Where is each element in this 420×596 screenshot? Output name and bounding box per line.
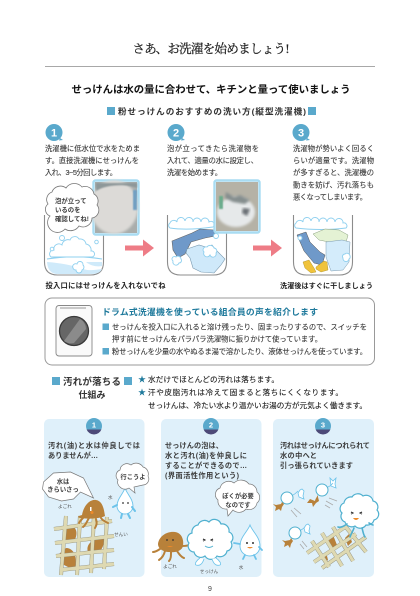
step 3 text (293, 144, 374, 202)
icon: step number 1: 1 (51, 128, 57, 140)
step 1 text (45, 144, 140, 177)
section heading: powder soap washing method: 粉せっけんのおすすめの洗い方(縦型洗濯機) (118, 106, 306, 116)
step 2 text: 洗濯を始めます。 (167, 168, 222, 177)
labels: 水 (239, 564, 244, 570)
icon: number badge 2: 2 (209, 420, 213, 430)
speech bubble: dislike water: きらいさっ (47, 484, 79, 494)
labels: せんい (114, 532, 128, 538)
icon: number badge 2 (203, 418, 219, 434)
small soap trio: bottom (282, 524, 310, 548)
step 3 (292, 124, 374, 275)
bullet list: せっけんを投入口に入れると溶け残ったり、固まったりするので、スイッチを (112, 322, 367, 332)
step 1 text: 入れ、3~5分回します。 (45, 168, 117, 177)
text (280, 441, 370, 470)
text (48, 441, 140, 460)
labels: せっけん (200, 569, 219, 575)
page number: 9 (208, 586, 212, 593)
subtitle: せっけんは水の量に合わせて、キチンと量って使いましょう (72, 83, 350, 96)
panel: mechanism 2 (153, 418, 262, 577)
text: 汚れはせっけんにつれられて (280, 441, 370, 450)
fabric mesh with dirt (54, 515, 114, 575)
text: 水と汚れ(油)を仲良しに (165, 451, 247, 460)
icon: step number 1 (46, 124, 63, 141)
star notes: 汗や皮脂汚れは冷えて固まると落ちにくくなります。 (148, 387, 343, 397)
icon: number badge 1: 1 (92, 420, 96, 430)
labels: よごれ (58, 503, 72, 510)
icon: number badge 1 (86, 418, 102, 434)
speech bubble: check foam: 泡が立って (55, 196, 87, 205)
speech bubble: I am needed: ぼくが必要 (222, 491, 254, 500)
icon: step number 3: 3 (298, 128, 304, 140)
fabric mesh with dirt (307, 526, 366, 568)
step 1 text: す。直接洗濯機にせっけんを (45, 156, 139, 165)
heading: how dirt comes off (52, 376, 132, 400)
text: 引っ張られていきます (280, 461, 353, 470)
step 3 text: 洗濯物が勢いよく回るく (293, 144, 374, 153)
large soap character (338, 494, 379, 537)
washing tub 1 (44, 215, 104, 275)
icon: step number 2 (168, 124, 185, 141)
washing tub 3 with clothes (294, 215, 352, 275)
step 3 text: が多すぎると、洗濯機の (293, 168, 374, 177)
step 2 text: 入れて、適量の水に設定し、 (167, 156, 258, 165)
labels: よごれ (163, 563, 177, 570)
bullet list: 粉せっけんを少量の水やぬるま湯で溶かしたり、液体せっけんを使っています。 (112, 347, 367, 356)
icon: step number 2: 2 (173, 128, 179, 140)
icon: drum washing machine (56, 306, 92, 356)
step 1 text: 洗濯機に低水位で水をためま (45, 144, 140, 153)
text: (界面活性作用という) (165, 471, 240, 480)
speech bubble: dislike water (42, 472, 94, 501)
water drop character (234, 525, 262, 559)
dirt character (78, 500, 108, 528)
labels (58, 494, 128, 538)
washing tub 2 with clothes (168, 215, 226, 275)
icon: number badge 3: 3 (321, 420, 325, 430)
panel: mechanism 3 (273, 418, 379, 577)
speech bubble: I am needed: なのです (225, 500, 251, 509)
step 3 text: らいが適量です。洗濯物 (293, 156, 374, 165)
water drop character (113, 488, 135, 518)
step 2 (167, 124, 260, 275)
text (165, 441, 247, 480)
star notes: 水だけでほとんどの汚れは落ちます。 (148, 374, 279, 384)
star notes: ★ (138, 388, 146, 397)
bullet list (102, 322, 367, 356)
soap character (187, 519, 233, 565)
text: 汚れ(油)と水は仲良しでは (48, 441, 140, 450)
speech bubble: check foam: 確認してね! (55, 214, 89, 223)
speech bubble: I am needed (215, 480, 260, 516)
labels (163, 563, 244, 575)
star notes: せっけんは、冷たい水より温かいお湯の方が元気よく働きます。 (148, 400, 367, 410)
step 2 text: 泡が立ってきたら洗濯物を (167, 144, 259, 153)
title: さあ、お洗濯を始めましょう! (132, 41, 290, 56)
bullet list: 押す前にせっけんをパラパラ洗濯物に振りかけて使っています。 (112, 334, 322, 344)
small soap trio: top right (307, 478, 336, 507)
small soap trio: top left (273, 489, 304, 511)
labels: 水 (108, 494, 113, 500)
text: することができるので… (165, 461, 247, 470)
caption: do not put soap in the inlet: 投入口にはせっけんを入れないでね (46, 281, 166, 290)
arrow 2 (253, 240, 282, 256)
step 3 text: 動きを妨げ、汚れ落ちも (293, 180, 374, 190)
speech bubble: check foam (45, 183, 99, 232)
photo: clothes and foam (214, 180, 260, 232)
panel: drum washer voices (45, 298, 374, 365)
speech bubble: let's go (116, 463, 149, 493)
text: 水の中へと (280, 451, 317, 460)
photo: foam in washer (90, 180, 138, 234)
speech bubble: check foam: いるのを (55, 206, 81, 214)
step 2 text (167, 144, 259, 177)
caption: hang laundry immediately: 洗濯後はすぐに干しましょう (280, 281, 373, 290)
arrow 1 (125, 240, 154, 256)
heading: how dirt comes off: 汚れが落ちる (63, 376, 121, 388)
icon: step number 3 (292, 124, 310, 141)
heading: how dirt comes off: 仕組み (78, 389, 106, 400)
star notes (138, 374, 367, 410)
step 1 (44, 124, 140, 275)
motion lines (291, 498, 337, 549)
speech bubble: dislike water: 水は (57, 476, 70, 486)
text: ありませんが… (48, 451, 98, 460)
panel: mechanism 1 (42, 418, 149, 577)
text: せっけんの泡は、 (165, 441, 223, 450)
dirt character (153, 532, 189, 561)
speech bubble: let's go: 行こうよ (120, 472, 146, 481)
step 3 text: 悪くなってしまいます。 (293, 192, 367, 202)
icon: number badge 3 (315, 418, 331, 434)
voices heading: ドラム式洗濯機を使っている組合員の声を紹介します (102, 306, 318, 317)
star notes: ★ (138, 375, 146, 384)
